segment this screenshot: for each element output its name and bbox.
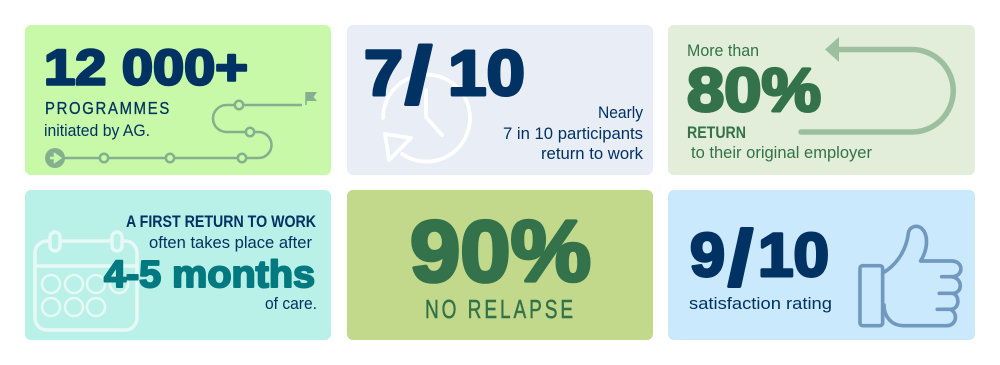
label: no relapse: NO RELAPSE (425, 294, 576, 324)
icon: clock with return arrow (383, 75, 470, 162)
big number: 9/10: 9 (690, 221, 725, 289)
text: of care.: of care. (265, 294, 317, 313)
icon: winding route (45, 92, 317, 168)
text: to their original employer: to their original employer (691, 143, 872, 162)
heading: a first return to work: A FIRST RETURN TO WORK (126, 213, 316, 231)
text: nearly 7 in 10 participants return to work: return to work (541, 144, 643, 163)
label: programmes: PROGRAMMES (45, 98, 171, 118)
big number: 9/10: / (728, 214, 753, 302)
big number: 4-5 months: 4-5 months (104, 254, 315, 296)
big number: 7/10: / (405, 31, 432, 120)
big number: 7/10: 10 (448, 37, 525, 109)
text: more than: More than (687, 41, 759, 60)
text: often takes place after: often takes place after (149, 233, 312, 252)
big number: 80%: 80% (687, 56, 821, 124)
big number: 7/10: 7 (364, 37, 403, 109)
text: satisfaction rating: satisfaction rating (689, 294, 832, 313)
text: nearly 7 in 10 participants return to work: Nearly (598, 103, 643, 122)
icon: calendar (35, 232, 137, 330)
icon: return arrow (801, 37, 953, 132)
panel: return to work (347, 25, 653, 175)
panel: original employer (668, 25, 975, 175)
panel: no relapse (347, 190, 653, 340)
big number: 7/10 (364, 31, 525, 120)
big number: 90%: 90% (410, 204, 591, 300)
panel: satisfaction (668, 190, 975, 340)
big number: 9/10 (690, 214, 829, 302)
text: nearly 7 in 10 participants return to work: 7 in 10 participants (503, 124, 643, 143)
icon: thumbs up (860, 226, 961, 326)
panel: first return timing (25, 190, 331, 340)
big number: 9/10: 10 (758, 221, 829, 289)
text: nearly 7 in 10 participants return to work (503, 103, 643, 163)
big number: 12 000+: 12 000+ (44, 40, 248, 96)
label: return: RETURN (687, 124, 746, 142)
panel: programmes (25, 25, 331, 175)
text: initiated by AG.: initiated by AG. (44, 121, 150, 140)
